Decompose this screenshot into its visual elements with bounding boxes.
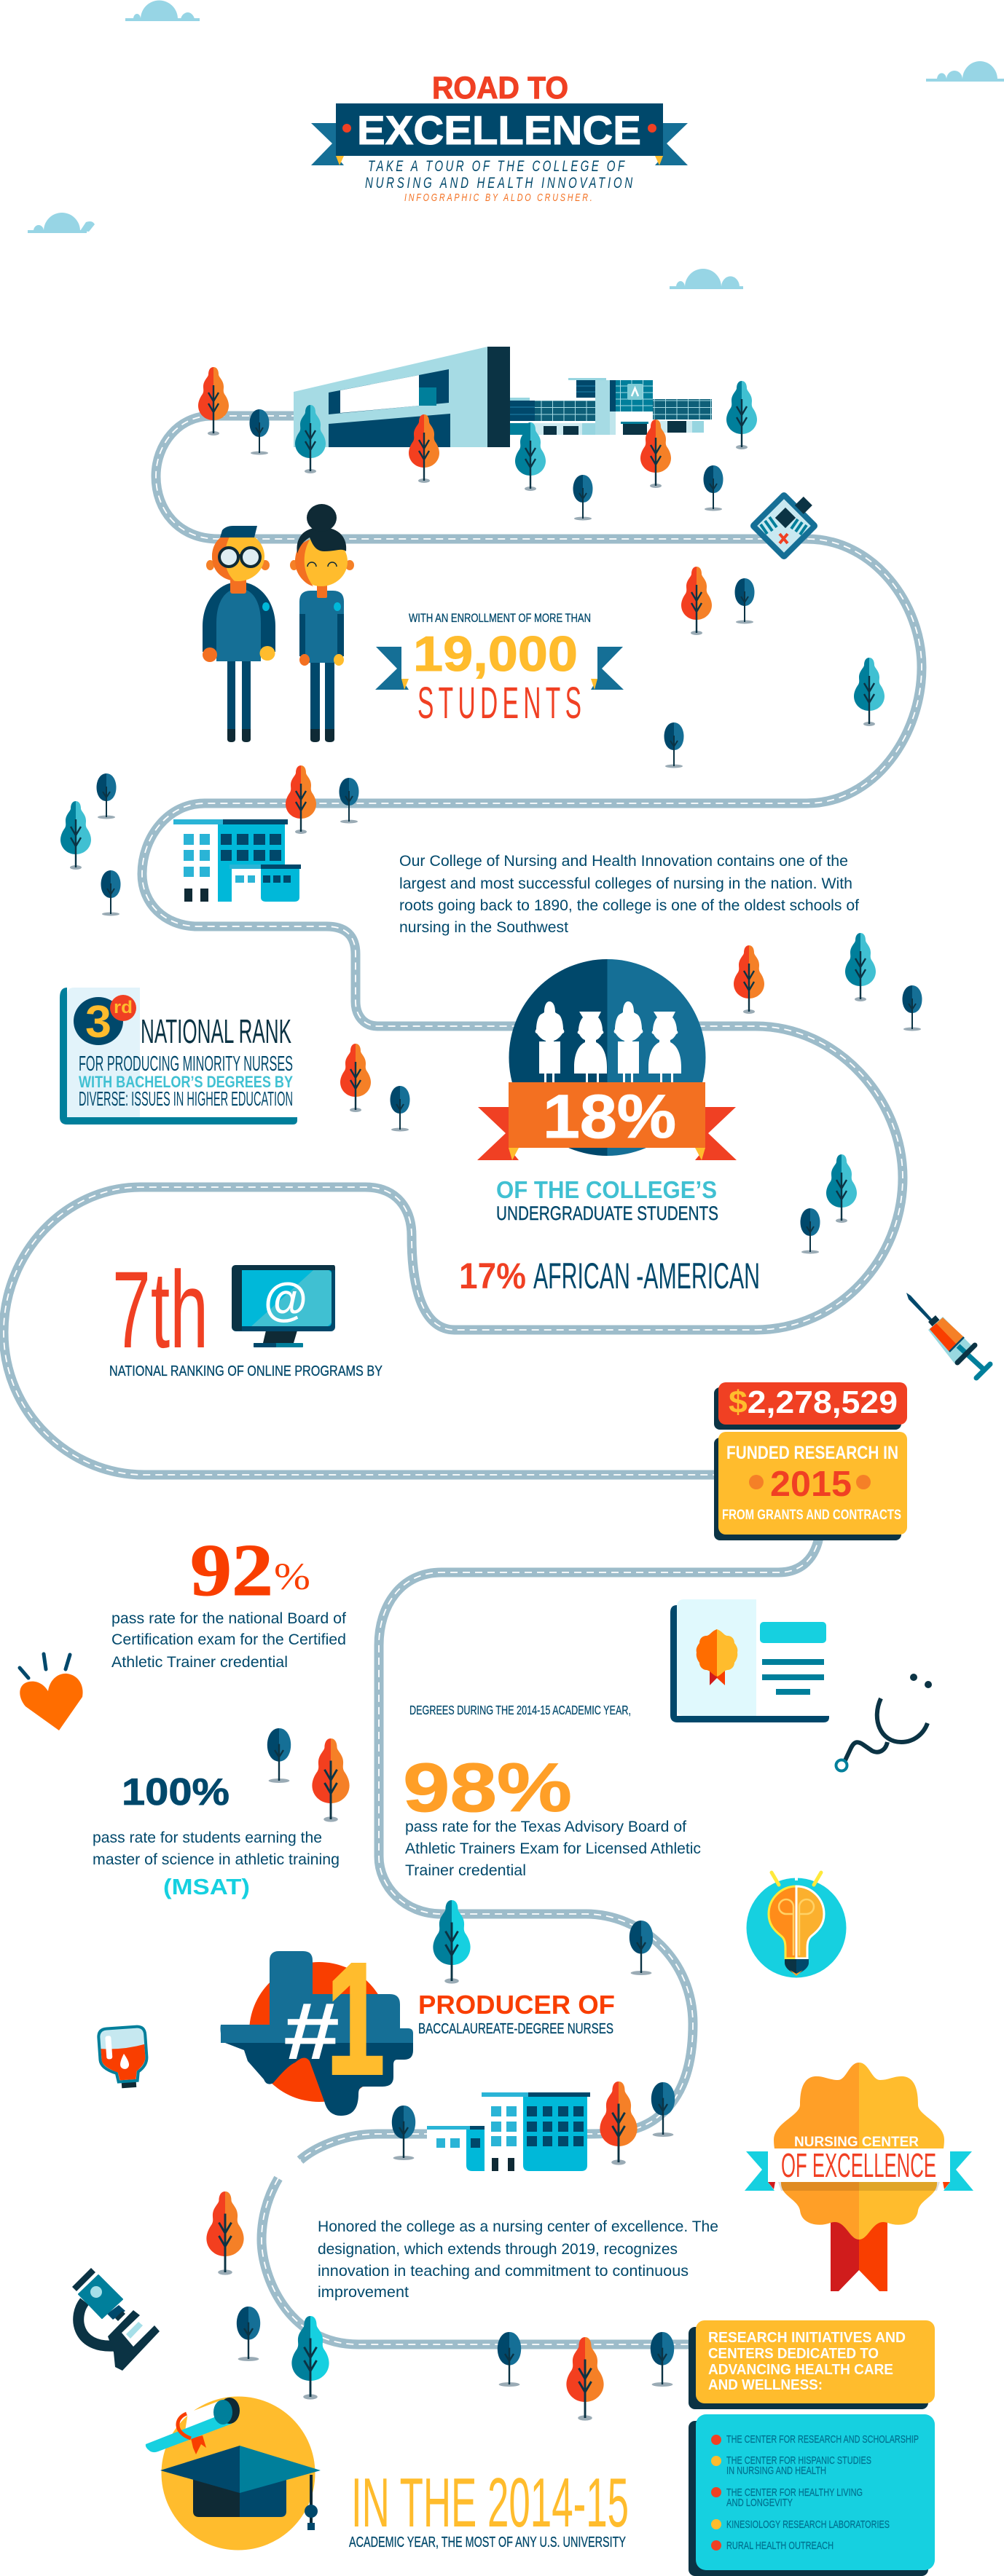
cloud — [926, 61, 1004, 82]
tree — [198, 367, 229, 436]
road — [4, 416, 922, 2344]
undergraduate students: UNDERGRADUATE STUDENTS — [496, 1202, 718, 1224]
badge right half — [859, 2063, 944, 2240]
research centers list: RURAL HEALTH OUTREACH — [726, 2540, 834, 2552]
ribbon tail right — [655, 123, 688, 165]
diploma ribbon — [178, 2414, 191, 2438]
header block — [760, 1622, 826, 1643]
7th stat: 7th — [112, 1248, 208, 1371]
funding box: description — [714, 1432, 907, 1540]
92 percent description — [111, 1610, 346, 1671]
intro text: largest and most successful colleges of nursing in the nation. With — [399, 875, 852, 892]
ribbon tail left — [311, 123, 344, 165]
texas lower — [225, 2043, 413, 2116]
cap body right — [240, 2476, 286, 2517]
arms — [203, 582, 275, 652]
intro text: nursing in the Southwest — [399, 919, 568, 936]
92 percent stat — [190, 1529, 310, 1612]
academic year label: ACADEMIC YEAR, THE MOST OF ANY U.S. UNIVERSITY — [349, 2534, 626, 2551]
ribbon right — [859, 2214, 887, 2291]
icon: iv bag — [98, 2026, 149, 2089]
hash: # — [282, 1986, 338, 2076]
neck — [317, 583, 327, 598]
honor text: improvement — [318, 2284, 409, 2301]
tree — [286, 765, 316, 834]
research centers list: THE CENTER FOR RESEARCH AND SCHOLARSHIP — [726, 2433, 919, 2446]
tree — [498, 2332, 521, 2387]
98 percent description: pass rate for the Texas Advisory Board of — [405, 1819, 686, 1835]
tree — [734, 945, 764, 1014]
100 percent description: pass rate for students earning the — [93, 1829, 322, 1846]
students: STUDENTS — [417, 678, 581, 728]
tree — [726, 381, 757, 449]
number one: 1 — [326, 1931, 385, 2108]
hands — [299, 654, 310, 666]
tree — [291, 2316, 329, 2400]
line: WITH BACHELOR’S DEGREES BY — [79, 1073, 293, 1091]
tree — [681, 567, 712, 635]
lines — [762, 1659, 824, 1695]
18 percent: 18% — [543, 1082, 676, 1151]
hand — [259, 646, 275, 661]
icon: certificate — [670, 1599, 829, 1722]
in the 2014-15 heading: IN THE 2014-15 — [351, 2464, 629, 2542]
tree — [640, 420, 671, 488]
ribbon right — [695, 1107, 737, 1160]
subtitle line 1: TAKE A TOUR OF THE COLLEGE OF — [368, 157, 626, 175]
diploma end — [213, 2400, 232, 2425]
diploma end dark — [219, 2398, 240, 2424]
tail left — [745, 2151, 774, 2191]
research centers list: THE CENTER FOR HEALTHY LIVING — [726, 2486, 863, 2499]
intro text — [399, 853, 859, 936]
head — [212, 532, 264, 581]
icon: heart — [20, 1654, 83, 1730]
diploma ribbon tails — [191, 2435, 206, 2454]
yellow disc — [162, 2396, 315, 2551]
seal right — [717, 1629, 737, 1677]
ribbon right — [591, 647, 624, 690]
banner shadow — [778, 2182, 940, 2191]
research centers list: KINESIOLOGY RESEARCH LABORATORIES — [726, 2518, 890, 2531]
honor text: innovation in teaching and commitment to continuous — [318, 2263, 689, 2280]
honor text: Honored the college as a nursing center of excellence. The — [318, 2218, 718, 2235]
tree — [664, 722, 683, 768]
funding box: description: FROM GRANTS AND CONTRACTS — [722, 1508, 901, 1523]
tree — [651, 2332, 674, 2387]
tree — [651, 2082, 675, 2137]
100 percent description — [93, 1829, 340, 1868]
card tint — [67, 988, 140, 1117]
research centers list: THE CENTER FOR HISPANIC STUDIES — [726, 2454, 871, 2467]
tail right — [944, 2151, 973, 2191]
banner dot left — [342, 124, 351, 133]
92 percent stat: 92 — [190, 1529, 273, 1612]
banner — [336, 103, 663, 156]
card: 3rd national rank — [60, 988, 297, 1124]
19,000: 19,000 — [413, 626, 578, 682]
hair bun — [307, 504, 337, 532]
tree — [704, 465, 723, 511]
research box heading: RESEARCH INITIATIVES AND — [708, 2330, 906, 2346]
tree — [249, 409, 270, 454]
figure: woman — [290, 504, 354, 742]
tassel end — [307, 2523, 315, 2530]
hands — [203, 647, 217, 662]
african american: AFRICAN -AMERICAN — [533, 1256, 760, 1296]
tree — [340, 778, 358, 823]
heading: excellence: EXCELLENCE — [357, 107, 641, 153]
tree — [392, 2106, 415, 2160]
certificate page — [677, 1599, 829, 1716]
diploma white — [184, 2400, 232, 2440]
producer heading: PRODUCER OF — [418, 1990, 615, 2020]
head — [295, 537, 348, 586]
face shade — [212, 532, 235, 581]
certificate back — [670, 1605, 829, 1722]
research centers list — [689, 2414, 935, 2576]
tree — [826, 1154, 857, 1223]
hand — [334, 654, 344, 666]
ribbon fold left — [336, 156, 344, 165]
tree — [566, 2337, 604, 2421]
research box heading: AND WELLNESS: — [708, 2377, 823, 2393]
circle left — [509, 959, 608, 1156]
fold right — [695, 1148, 705, 1160]
research box heading: ADVANCING HEALTH CARE — [708, 2362, 893, 2378]
18 percent emblem — [477, 959, 737, 1160]
ribbon left — [477, 1107, 519, 1160]
tree — [267, 1728, 291, 1783]
icon: graduation cap — [146, 2396, 321, 2551]
badge: nursing center of excellence — [745, 2063, 973, 2291]
diploma cyan — [146, 2412, 232, 2452]
tree — [295, 405, 326, 473]
tree — [573, 475, 593, 520]
figure: man — [203, 526, 275, 742]
tree — [391, 1086, 409, 1132]
tree — [312, 1738, 350, 1822]
ribbon left — [831, 2214, 859, 2291]
line: DIVERSE: ISSUES IN HIGHER EDUCATION — [79, 1087, 293, 1110]
92 percent description: Certification exam for the Certified — [111, 1631, 346, 1648]
100 percent description: master of science in athletic training — [93, 1851, 340, 1868]
icon: stethoscope — [836, 1674, 932, 1771]
intro text: Our College of Nursing and Health Innovation contains one of the — [399, 853, 848, 870]
icon: syringe — [906, 1293, 990, 1378]
circle right — [608, 959, 705, 1156]
98 percent description: Trainer credential — [405, 1862, 526, 1879]
glasses — [219, 548, 260, 567]
tree — [206, 2191, 244, 2275]
ribbon fold right — [655, 156, 663, 165]
tree — [433, 1900, 471, 1984]
tree — [60, 801, 91, 870]
funding box: description: 2015 — [770, 1465, 852, 1504]
research centers list: AND LONGEVITY — [726, 2497, 793, 2509]
face shade — [295, 540, 313, 586]
tree — [800, 1208, 820, 1254]
cap top left — [160, 2446, 240, 2493]
line: FOR PRODUCING MINORITY NURSES — [79, 1052, 293, 1076]
tree — [515, 422, 546, 491]
shoes — [227, 729, 251, 742]
cloud — [670, 269, 743, 289]
tassel cord — [310, 2475, 313, 2524]
icon: monitor: @ — [264, 1273, 307, 1326]
rd circle — [110, 995, 136, 1021]
enrollment label: WITH AN ENROLLMENT OF MORE THAN — [409, 612, 591, 625]
baccalaureate label: BACCALAUREATE-DEGREE NURSES — [418, 2021, 613, 2037]
tree — [101, 870, 121, 916]
ribbon left — [375, 647, 409, 690]
MSAT label: (MSAT) — [163, 1874, 250, 1899]
98 percent stat: 98% — [403, 1749, 572, 1827]
seal ribbon — [710, 1668, 717, 1685]
100 percent stat: 100% — [122, 1771, 230, 1813]
texas upper — [220, 1951, 413, 2043]
research box heading — [689, 2320, 935, 2409]
fold left — [401, 679, 409, 690]
banner dot right — [648, 124, 656, 133]
tree — [734, 578, 755, 623]
tree — [409, 414, 439, 483]
tree — [237, 2307, 260, 2361]
nursing center: NURSING CENTER — [794, 2135, 919, 2150]
students silhouettes — [536, 1001, 681, 1082]
fold left — [768, 2182, 775, 2189]
icon: microscope — [72, 2268, 160, 2371]
seal ribbon right — [717, 1668, 725, 1685]
ears — [290, 560, 354, 570]
honor text — [318, 2218, 718, 2301]
heading: of the college's: OF THE COLLEGE’S — [496, 1176, 717, 1203]
tree — [96, 773, 117, 819]
banner — [509, 1082, 705, 1148]
campus building — [294, 347, 712, 447]
students stat — [375, 612, 624, 728]
body — [299, 591, 344, 663]
intro text: roots going back to 1890, the college is one of the oldest schools of — [399, 897, 859, 914]
title — [311, 71, 688, 203]
cap top right — [240, 2446, 321, 2493]
fold right — [943, 2182, 950, 2189]
cloud — [125, 1, 200, 21]
subtitle line 2: NURSING AND HEALTH INNOVATION — [365, 173, 633, 192]
nursing campus building — [427, 2092, 590, 2171]
fold left — [509, 1148, 519, 1160]
fold right — [591, 679, 597, 690]
shoes — [310, 729, 334, 742]
icon: light bulb — [746, 1872, 847, 1978]
17 percent: 17% — [459, 1256, 526, 1296]
number one producer emblem — [220, 1931, 413, 2116]
92 percent description: Athletic Trainer credential — [111, 1654, 288, 1671]
icon: monitor — [232, 1265, 335, 1347]
92 percent description: pass rate for the national Board of — [111, 1610, 346, 1627]
tree — [600, 2081, 638, 2165]
torso — [216, 588, 261, 661]
92 percent stat: % — [274, 1556, 310, 1598]
certificate tint — [677, 1599, 756, 1716]
research centers list: IN NURSING AND HEALTH — [726, 2465, 826, 2477]
98 percent description — [405, 1819, 701, 1879]
tree — [845, 933, 876, 1001]
ears — [206, 560, 270, 570]
honor text: designation, which extends through 2019, recognizes — [318, 2241, 678, 2258]
icon: medical chart — [749, 491, 819, 561]
banner — [768, 2148, 949, 2182]
card back — [60, 988, 297, 1124]
neck — [230, 575, 246, 594]
national rank: NATIONAL RANK — [141, 1012, 291, 1050]
eyes — [307, 562, 337, 567]
red circle — [249, 1962, 389, 2102]
arms — [299, 614, 344, 656]
badge left half — [774, 2063, 859, 2240]
seal left — [697, 1629, 717, 1677]
funding box: amount — [714, 1382, 907, 1430]
heading: road to: ROAD TO — [432, 71, 568, 106]
badge circle — [74, 997, 123, 1045]
tree — [854, 658, 885, 726]
cap body left — [193, 2476, 240, 2517]
tassel ball — [305, 2505, 318, 2518]
hair — [297, 527, 346, 554]
tree — [902, 985, 922, 1031]
college building — [173, 819, 301, 902]
research box heading: CENTERS DEDICATED TO — [708, 2346, 879, 2362]
degrees label: DEGREES DURING THE 2014-15 ACADEMIC YEAR, — [409, 1703, 631, 1717]
rd text: rd — [114, 998, 133, 1017]
hair — [220, 526, 257, 537]
badge — [334, 602, 341, 611]
legs — [310, 663, 334, 729]
badge — [262, 602, 270, 611]
legs — [227, 661, 251, 729]
tree — [340, 1044, 371, 1112]
number 3: 3 — [85, 997, 111, 1047]
credit: INFOGRAPHIC BY ALDO CRUSHER. — [404, 191, 592, 203]
online ranking label: NATIONAL RANKING OF ONLINE PROGRAMS BY — [109, 1363, 383, 1379]
tree — [630, 1921, 653, 1975]
98 percent description: Athletic Trainers Exam for Licensed Athletic — [405, 1840, 701, 1857]
funding box: amount: $2,278,529 — [729, 1384, 898, 1420]
funding box: description: FUNDED RESEARCH IN — [726, 1443, 898, 1463]
cloud — [28, 213, 95, 233]
